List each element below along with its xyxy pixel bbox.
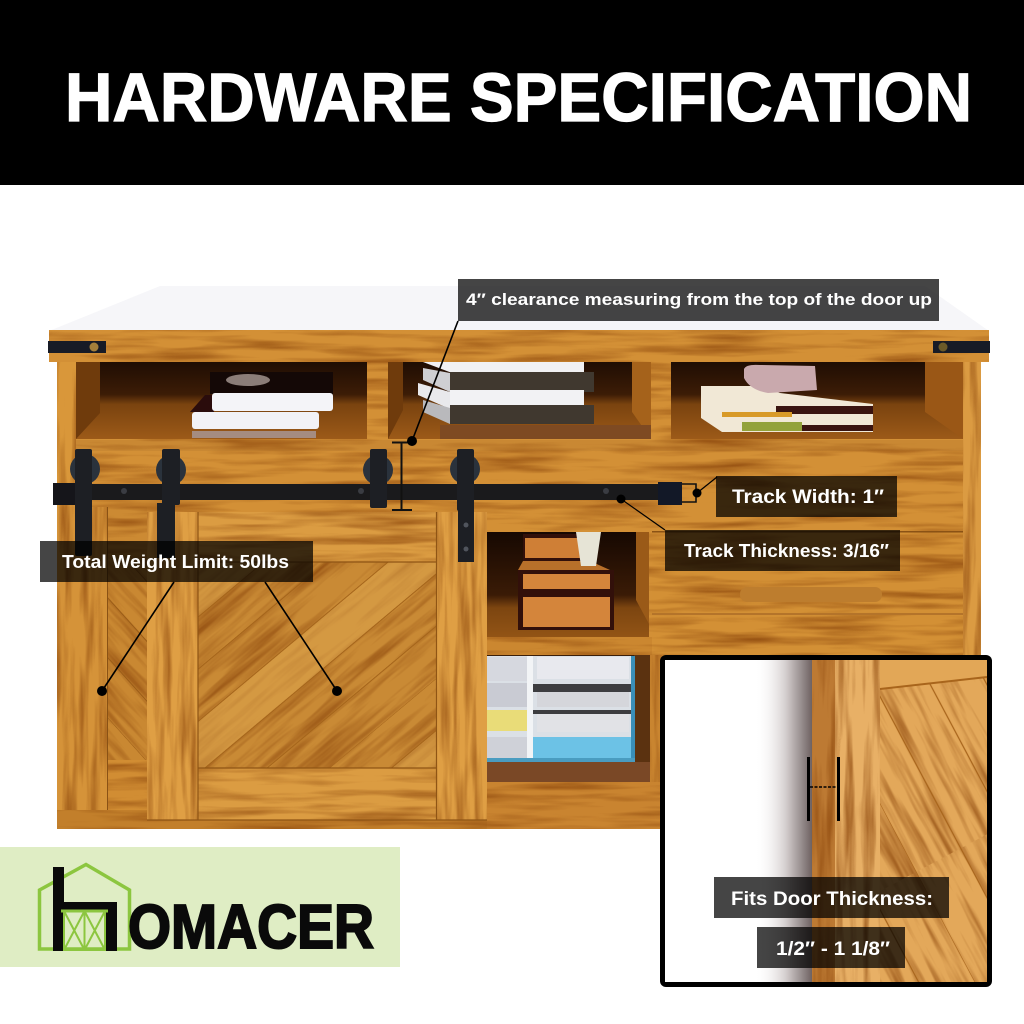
door diagonal panel xyxy=(198,562,437,768)
middle shelf niche xyxy=(388,362,651,439)
cabinet white top surface xyxy=(49,286,989,331)
callout: track width: Track Width: 1″ xyxy=(732,487,884,508)
hanger 2 xyxy=(156,449,186,558)
callout: clearance xyxy=(458,279,939,321)
main sliding door xyxy=(147,512,487,820)
mounting brackets xyxy=(48,341,990,353)
callout: thickness range: 1/2″ - 1 1/8″ xyxy=(776,939,890,960)
logo panel xyxy=(0,847,400,967)
inset top rail xyxy=(880,660,987,689)
logo: barn doors xyxy=(61,911,108,950)
door right stile xyxy=(436,512,487,820)
logo: wordmark: OMACER xyxy=(128,893,374,962)
door seams xyxy=(147,512,487,820)
hanger 3 xyxy=(363,449,393,508)
books, right niche xyxy=(701,365,873,432)
weight limit pointers xyxy=(97,582,342,696)
inset: door thickness detail xyxy=(660,655,992,987)
paper trays xyxy=(487,656,635,762)
door left stile xyxy=(147,512,198,820)
upper rail grain band xyxy=(76,440,963,451)
header banner xyxy=(0,0,1024,185)
callout: track thickness: Track Thickness: 3/16″ xyxy=(684,541,889,561)
door edge xyxy=(812,660,835,982)
cabinet body xyxy=(57,360,981,829)
hanger 4 xyxy=(450,449,480,562)
track thickness marker xyxy=(616,494,665,530)
hanger 1 xyxy=(70,449,100,556)
track xyxy=(53,484,677,500)
left sliding door xyxy=(57,507,147,810)
right end stop xyxy=(658,482,682,505)
upper cubby xyxy=(487,532,649,637)
callout: track thickness xyxy=(665,530,900,571)
logo: H mark xyxy=(53,867,117,951)
door stile xyxy=(835,660,880,982)
right shelf niche xyxy=(671,362,963,439)
shelf board between cubbies xyxy=(487,637,652,655)
books, middle niche xyxy=(418,362,594,424)
thickness measure marks xyxy=(808,757,838,821)
right drawer fronts xyxy=(652,531,963,656)
door shadow xyxy=(755,660,812,982)
callout: clearance: 4″ clearance measuring from the top of the door up xyxy=(466,290,932,309)
left door diagonal panel xyxy=(107,560,147,760)
title: HARDWARE SPECIFICATION xyxy=(65,59,972,136)
inset diagonal panel xyxy=(880,677,987,982)
cabinet illustration xyxy=(48,286,990,829)
storage boxes xyxy=(518,534,614,630)
callout: total weight limit xyxy=(40,541,313,582)
callout: fits door thickness: Fits Door Thickness: xyxy=(731,889,933,910)
lower cubby with paper organizer xyxy=(487,655,650,782)
barn door track and hangers xyxy=(53,449,682,562)
cup xyxy=(576,532,601,566)
strip beside lower cubby and cabinet base xyxy=(57,655,662,829)
door top rail xyxy=(197,512,437,562)
callout: fits door thickness xyxy=(714,877,949,918)
track width marker xyxy=(682,477,717,502)
books, left niche xyxy=(190,372,333,438)
cabinet top board xyxy=(49,330,989,362)
callout: track width xyxy=(716,476,897,517)
cabinet left and right posts xyxy=(57,360,981,660)
callout: total weight limit: Total Weight Limit: 50lbs xyxy=(62,552,289,572)
door bottom rail xyxy=(197,768,437,820)
logo: house outline xyxy=(40,864,130,949)
clearance dimension marker xyxy=(392,321,458,510)
track bolts xyxy=(121,488,609,494)
left shelf niche xyxy=(76,362,367,439)
left end stop xyxy=(53,483,76,505)
callout: thickness range xyxy=(757,927,905,968)
